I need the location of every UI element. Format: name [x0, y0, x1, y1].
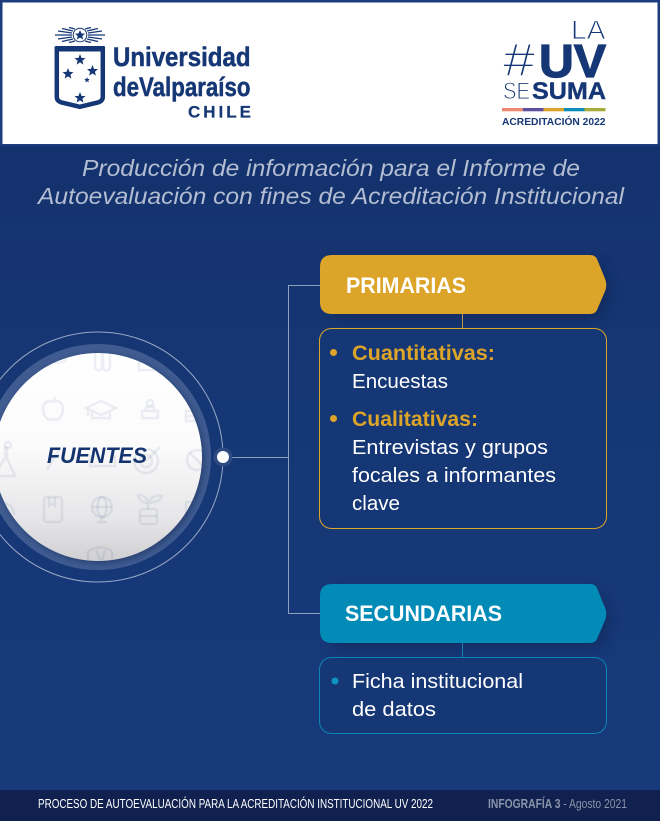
bullet and text: Cualitativas: Cualitativas:: [352, 408, 478, 431]
logo: La UV se suma: UV: [539, 35, 606, 87]
colour bars: [502, 108, 606, 111]
header shadow: [332, 590, 613, 649]
faint icon pattern: [0, 352, 207, 560]
logo: La UV se suma: LA: [571, 15, 606, 45]
logo: La UV se suma: #: [503, 34, 536, 86]
header: PRIMARIAS: PRIMARIAS: [346, 273, 466, 298]
plant jar: [140, 509, 157, 524]
title: [36, 155, 625, 209]
title: Autoevaluación con fines de Acreditación Institucional: [36, 183, 625, 209]
header: SECUNDARIAS: [320, 584, 606, 643]
logo wordmark: deValparaíso: [113, 72, 250, 102]
bullet and text: Cuantitativas: Encuestas: [352, 371, 448, 393]
icon: shield with stars: [56, 46, 104, 107]
logo wordmark: [113, 42, 251, 122]
right box: [184, 500, 192, 514]
book under text: [90, 455, 115, 466]
left globe: [4, 502, 16, 515]
bullet and text: Cualitativas: focales a informantes: [352, 465, 556, 487]
bullet and text: Cualitativas: Entrevistas y grupos: [352, 437, 548, 459]
box: secundarias content: [320, 658, 606, 734]
test tubes: [95, 352, 110, 370]
eye: [50, 358, 67, 363]
white disc: [0, 353, 202, 561]
bullet and text: Cuantitativas: Cuantitativas:: [352, 342, 495, 365]
bottom dome: [88, 548, 112, 560]
bullet and text: Cuantitativas: [330, 342, 495, 393]
panel: primarias: [320, 255, 613, 528]
notebook: [44, 497, 62, 522]
logo: La UV se suma: [502, 15, 606, 128]
connector dot: [214, 448, 232, 466]
bullet and text: Cualitativas: clave: [352, 493, 400, 515]
header shadow: [332, 261, 613, 320]
logo wordmark: CHILE: [188, 102, 251, 122]
ball right: [187, 450, 207, 470]
people pyramid: [147, 400, 153, 406]
box: secundarias content: de datos: [352, 699, 436, 721]
disc shadow: [0, 355, 204, 563]
logo wordmark: Universidad: [113, 42, 250, 72]
logo: La UV se suma: ACREDITACIÓN 2022: [502, 115, 606, 128]
outer thin ring: [0, 332, 223, 582]
logo: La UV se suma: SUMA: [532, 78, 606, 105]
header panel: [0, 0, 660, 146]
stem: [462, 314, 464, 328]
box: primarias content: [320, 328, 606, 528]
circle: FUENTES: [0, 332, 223, 582]
pencil: [47, 448, 60, 470]
apple: [43, 397, 63, 420]
stem: [462, 643, 464, 657]
box right: [186, 411, 198, 421]
icon: radiating star crest: [55, 28, 105, 42]
panel: secundarias: [320, 584, 613, 734]
header: SECUNDARIAS: SECUNDARIAS: [345, 601, 502, 626]
footer right text: INFOGRAFÍA 3 - Agosto 2021: [488, 796, 627, 811]
box: secundarias content: Ficha institucional: [352, 671, 523, 693]
header: PRIMARIAS: [320, 255, 606, 314]
target: [134, 449, 158, 473]
globe: [92, 497, 112, 517]
graduation cap: [86, 401, 116, 418]
logo: Universidad de Valparaíso: [55, 28, 251, 122]
label: FUENTES: FUENTES: [47, 443, 147, 468]
connector lines: [224, 286, 320, 614]
footer left text: PROCESO DE AUTOEVALUACIÓN PARA LA ACREDITACIÓN INSTITUCIONAL UV 2022: [38, 796, 433, 811]
inner thick ring: [0, 348, 206, 566]
flask: [0, 446, 15, 476]
logo: La UV se suma: SE: [503, 78, 530, 105]
title: Producción de información para el Informe de: [82, 155, 580, 181]
document: [138, 361, 156, 372]
footer: [0, 790, 660, 821]
bullet and text: Cualitativas: [330, 408, 556, 515]
